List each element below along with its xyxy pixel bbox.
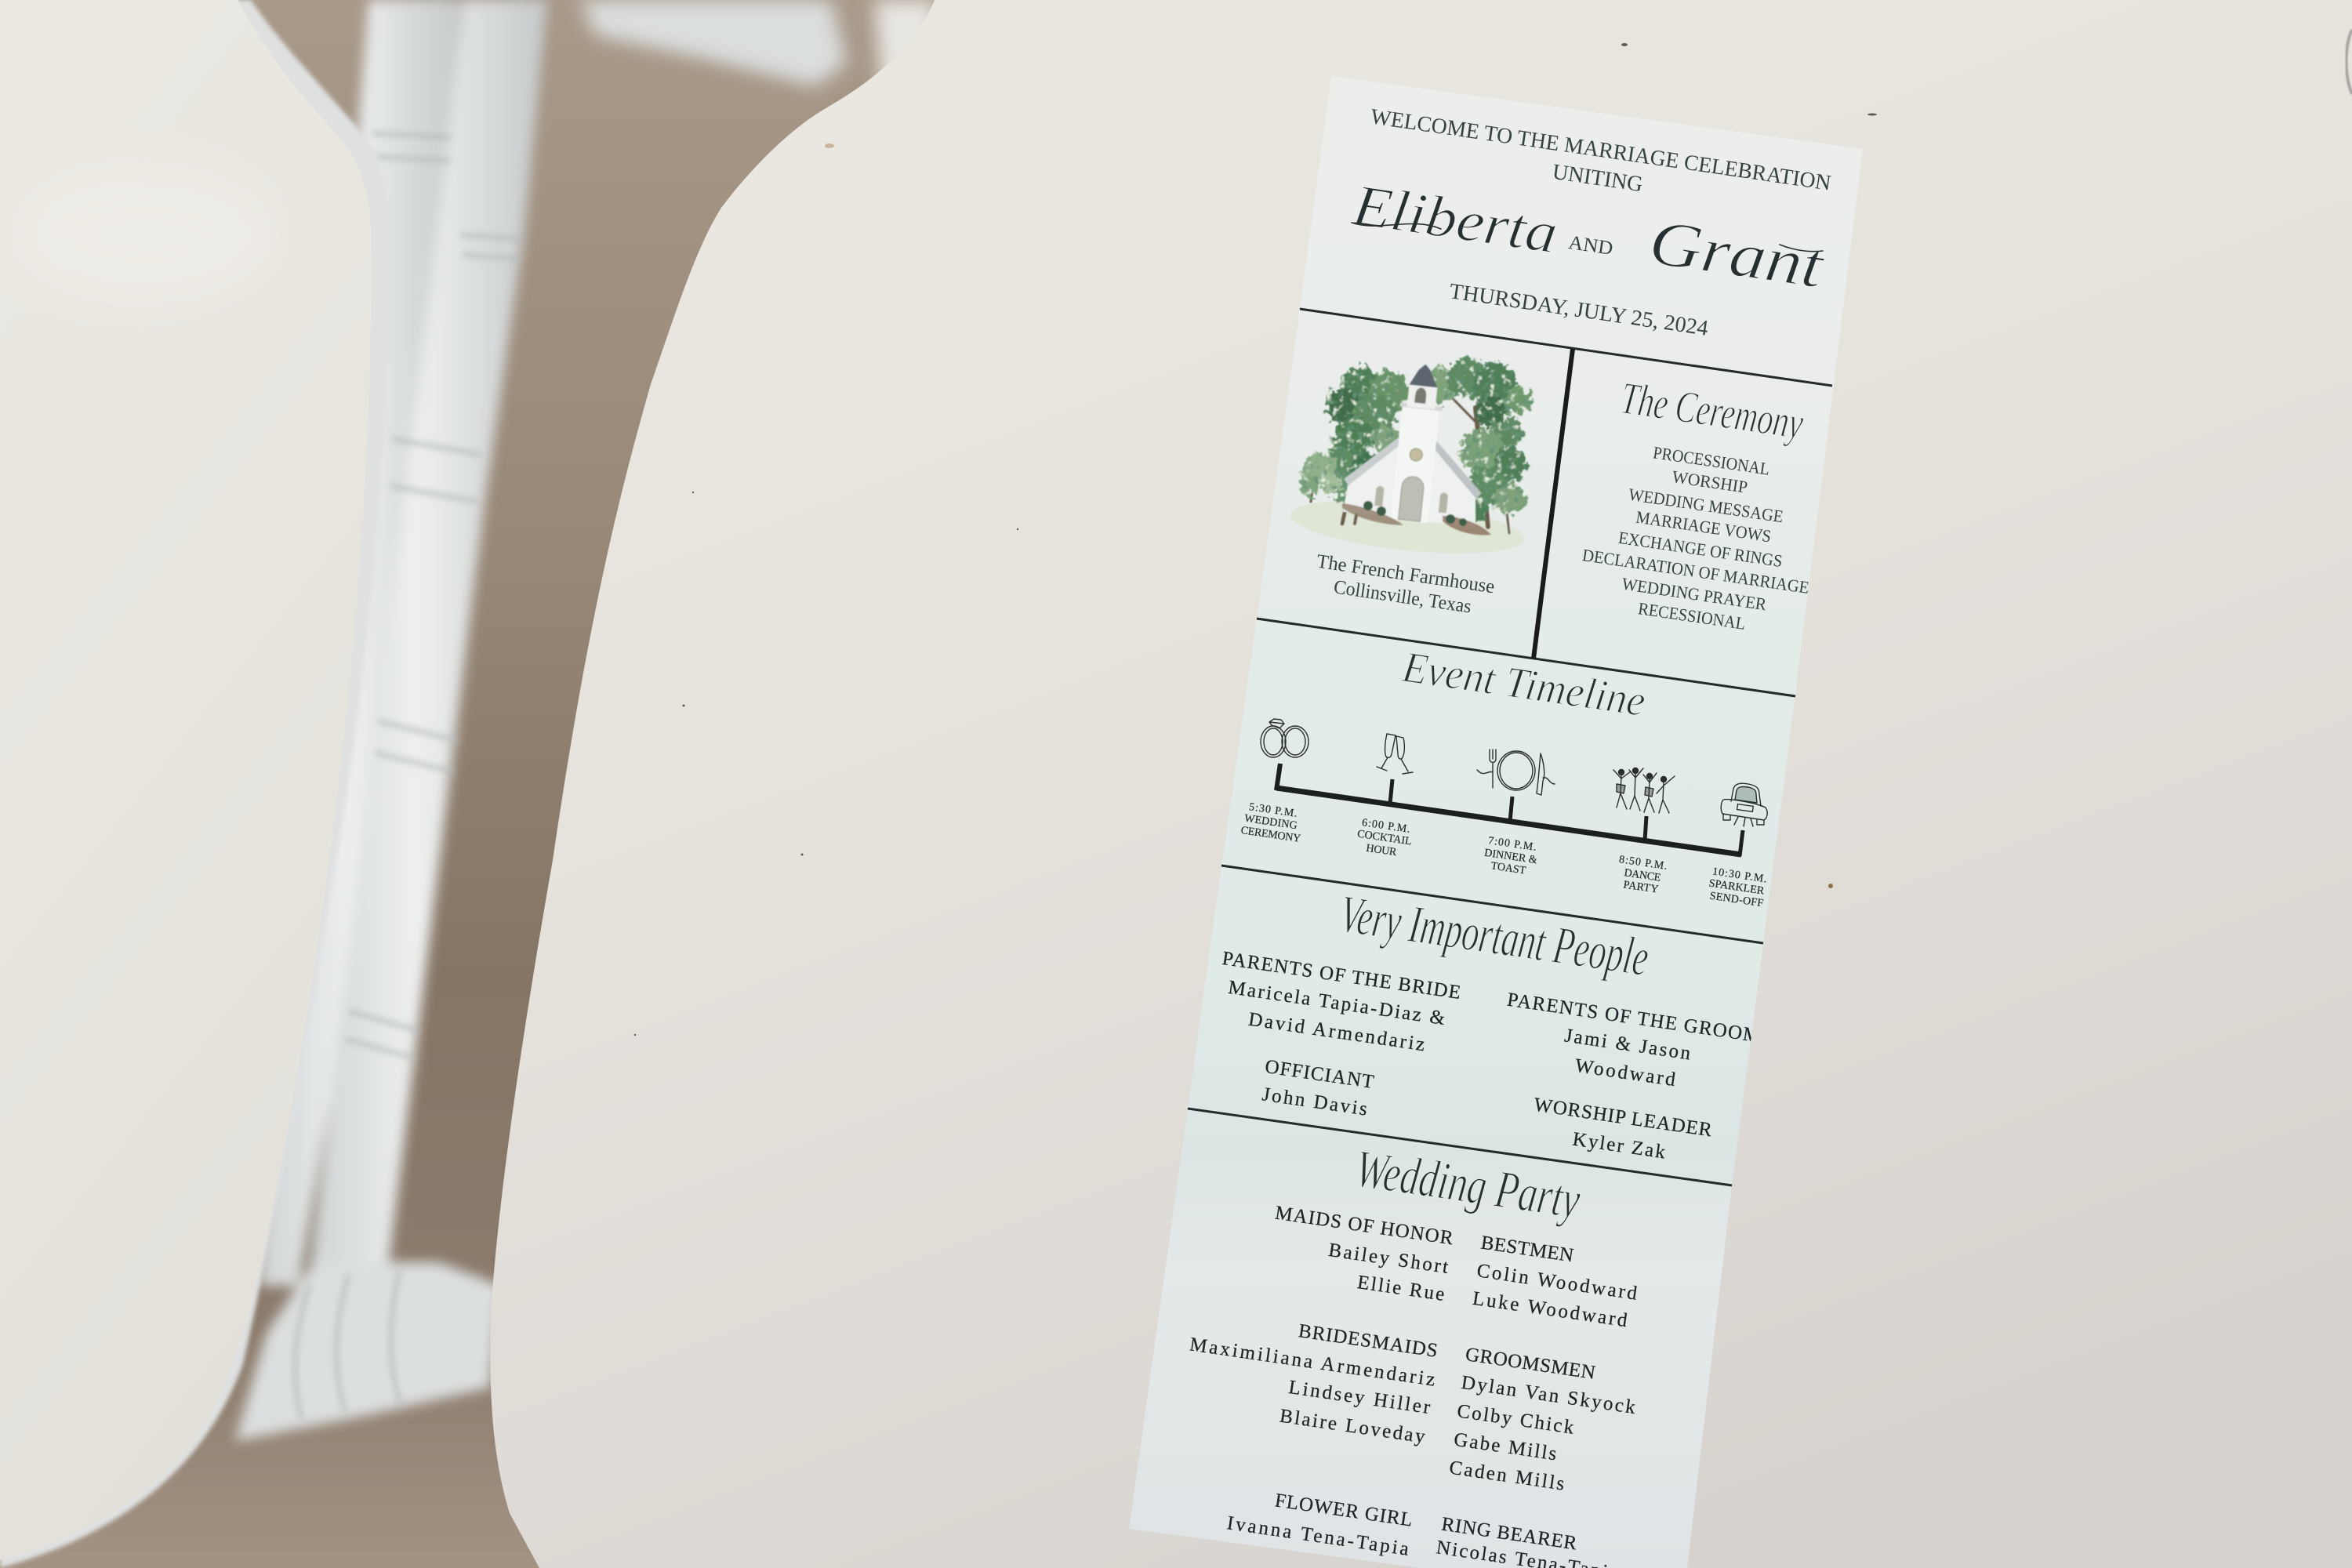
- far top rung: [580, 0, 847, 86]
- worship leader: [1535, 1098, 1711, 1159]
- icon: wedding rings: [1261, 719, 1308, 757]
- groomsmen: Caden Mills: [1448, 1457, 1566, 1495]
- groomsmen: Dylan Van Skyock: [1460, 1372, 1637, 1418]
- header text: AND: [1567, 232, 1614, 260]
- label: cocktail hour: 6:00 P.M.: [1361, 817, 1411, 836]
- flower girl: FLOWER GIRL: [1273, 1490, 1414, 1531]
- officiant: John Davis: [1261, 1083, 1369, 1120]
- tree trunks: [1311, 388, 1509, 533]
- left tree crowns: [1298, 367, 1410, 504]
- ceremony order list: RECESSIONAL: [1637, 598, 1747, 633]
- ground wash: [1288, 491, 1526, 563]
- label: wedding ceremony: WEDDING: [1243, 813, 1298, 832]
- ceremony order list: DECLARATION OF MARRIAGE: [1581, 545, 1810, 597]
- maids of honor: Ellie Rue: [1356, 1272, 1446, 1305]
- groomsmen: GROOMSMEN: [1464, 1344, 1597, 1384]
- timeline heading script: Event Timeline: [1399, 643, 1649, 726]
- icon: plate with fork and knife: [1477, 750, 1555, 795]
- groom name script: Grant: [1645, 205, 1829, 302]
- panel: very important people: [1221, 884, 1762, 1163]
- right seat surface: [490, 0, 2352, 1568]
- worship leader: WORSHIP LEADER: [1533, 1094, 1713, 1141]
- ceremony order list: WEDDING PRAYER: [1621, 574, 1768, 614]
- venue caption: Collinsville, Texas: [1332, 576, 1472, 618]
- worship leader: Kyler Zak: [1571, 1129, 1667, 1163]
- panel: wedding party: [1189, 1138, 1639, 1568]
- header text: [1348, 104, 1832, 341]
- panel: event timeline: [1240, 643, 1768, 909]
- maids of honor: Bailey Short: [1327, 1240, 1450, 1278]
- church building: [1341, 358, 1494, 528]
- bestmen: [1472, 1232, 1639, 1331]
- bride name script: Eliberta: [1348, 172, 1562, 267]
- ceremony order list: WORSHIP: [1671, 466, 1749, 497]
- label: cocktail hour: HOUR: [1365, 843, 1398, 858]
- left chair seat: [0, 0, 390, 1568]
- bridesmaids: Blaire Loveday: [1278, 1406, 1427, 1447]
- parents of the groom: PARENTS OF THE GROOM: [1506, 989, 1762, 1047]
- timeline bar and stems: [1276, 764, 1743, 856]
- bridesmaids: Maximiliana Armendariz: [1189, 1334, 1436, 1391]
- leg ridges: [295, 133, 524, 1419]
- label: dinner and toast: 7:00 P.M.: [1487, 835, 1537, 854]
- label: dinner and toast: [1483, 835, 1538, 877]
- label: dance party: 8:50 P.M.: [1618, 854, 1668, 873]
- left seat top surface: [0, 0, 372, 1560]
- program card: [1129, 76, 1863, 1568]
- header text: THURSDAY, JULY 25, 2024: [1448, 279, 1710, 341]
- parents of the groom: Jami & Jason: [1563, 1025, 1693, 1065]
- panel: the ceremony: [1581, 372, 1810, 633]
- ceremony order list: PROCESSIONAL: [1652, 442, 1771, 479]
- venue caption: The French Farmhouse: [1316, 551, 1496, 597]
- icon: dancing party: [1613, 768, 1675, 813]
- maids of honor: MAIDS OF HONOR: [1274, 1203, 1454, 1249]
- parents of the bride: David Armendariz: [1247, 1009, 1426, 1055]
- divider rules: [1188, 309, 1832, 1185]
- chair leg front tube: [310, 0, 547, 1274]
- seat edge chip: [825, 143, 834, 148]
- ceremony order list: MARRIAGE VOWS: [1635, 507, 1773, 546]
- bridesmaids: Lindsey Hiller: [1287, 1377, 1432, 1418]
- right tree crowns: [1422, 358, 1530, 522]
- parents of the groom: [1507, 993, 1751, 1087]
- label: dinner and toast: TOAST: [1490, 860, 1527, 877]
- label: cocktail hour: COCKTAIL: [1356, 829, 1413, 848]
- wedding party heading script: Wedding Party: [1352, 1138, 1584, 1230]
- name flourishes: [1352, 223, 1823, 252]
- label: cocktail hour: [1356, 817, 1413, 858]
- timeline labels: [1240, 801, 1768, 909]
- bridesmaids: BRIDESMAIDS: [1297, 1320, 1439, 1362]
- bridesmaids: [1189, 1320, 1439, 1447]
- ceremony order list: WEDDING MESSAGE: [1628, 485, 1784, 526]
- parents of the groom: Woodward: [1573, 1055, 1677, 1091]
- label: sparkler send-off: SEND-OFF: [1709, 891, 1764, 909]
- parents of the bride: PARENTS OF THE BRIDE: [1221, 948, 1462, 1004]
- venue illustration: church among trees: [1288, 358, 1530, 563]
- ceremony order list: EXCHANGE OF RINGS: [1617, 528, 1784, 571]
- specks on seat: [634, 43, 1877, 1036]
- card background: [1129, 76, 1863, 1568]
- label: dance party: [1618, 854, 1668, 896]
- flower girl: [1226, 1493, 1411, 1556]
- left seat side lip: [0, 0, 390, 1568]
- label: dance party: PARTY: [1623, 879, 1659, 896]
- bestmen: Colin Woodward: [1475, 1260, 1639, 1305]
- parents of the bride: [1221, 948, 1462, 1055]
- label: sparkler send-off: 10:30 P.M.: [1711, 866, 1768, 885]
- top-right edge arc: [2346, 30, 2352, 94]
- officiant: OFFICIANT: [1264, 1056, 1375, 1093]
- header text: WELCOME TO THE MARRIAGE CELEBRATION: [1369, 104, 1832, 196]
- parents of the bride: Maricela Tapia-Diaz &: [1227, 977, 1446, 1029]
- label: wedding ceremony: CEREMONY: [1240, 825, 1301, 845]
- ring bearer: [1436, 1517, 1607, 1568]
- tree crowns: [1298, 358, 1530, 522]
- label: wedding ceremony: 5:30 P.M.: [1248, 801, 1298, 820]
- lower rung foot: [235, 1262, 502, 1441]
- label: wedding ceremony: [1240, 801, 1301, 845]
- label: sparkler send-off: [1708, 866, 1768, 909]
- left seat highlight: [16, 165, 282, 306]
- ceremony heading script: The Ceremony: [1617, 372, 1806, 449]
- ceremony order list: [1581, 442, 1810, 633]
- right chair seat: [490, 0, 2352, 1568]
- VIP heading script: Very Important People: [1337, 884, 1653, 987]
- icon: getaway car rear view: [1721, 783, 1767, 826]
- blurred chair legs and rungs: [580, 0, 937, 94]
- chair leg rear tube: [259, 0, 463, 1286]
- mulch and shrubs: [1342, 503, 1403, 525]
- groomsmen: [1448, 1344, 1637, 1495]
- ring bearer: RING BEARER: [1440, 1514, 1578, 1554]
- groomsmen: Colby Chick: [1456, 1400, 1576, 1439]
- flower girl: Ivanna Tena-Tapia: [1225, 1512, 1410, 1560]
- label: dinner and toast: DINNER &: [1483, 848, 1538, 866]
- maids of honor: [1274, 1203, 1454, 1305]
- bestmen: BESTMEN: [1479, 1232, 1575, 1266]
- bestmen: Luke Woodward: [1472, 1288, 1629, 1331]
- label: dance party: DANCE: [1624, 867, 1661, 884]
- groomsmen: Gabe Mills: [1453, 1429, 1558, 1465]
- officiant: [1261, 1060, 1375, 1115]
- label: sparkler send-off: SPARKLER: [1708, 877, 1766, 898]
- far chair post at top: [874, 0, 937, 94]
- icon: champagne flutes: [1377, 734, 1413, 774]
- header text: UNITING: [1551, 160, 1644, 197]
